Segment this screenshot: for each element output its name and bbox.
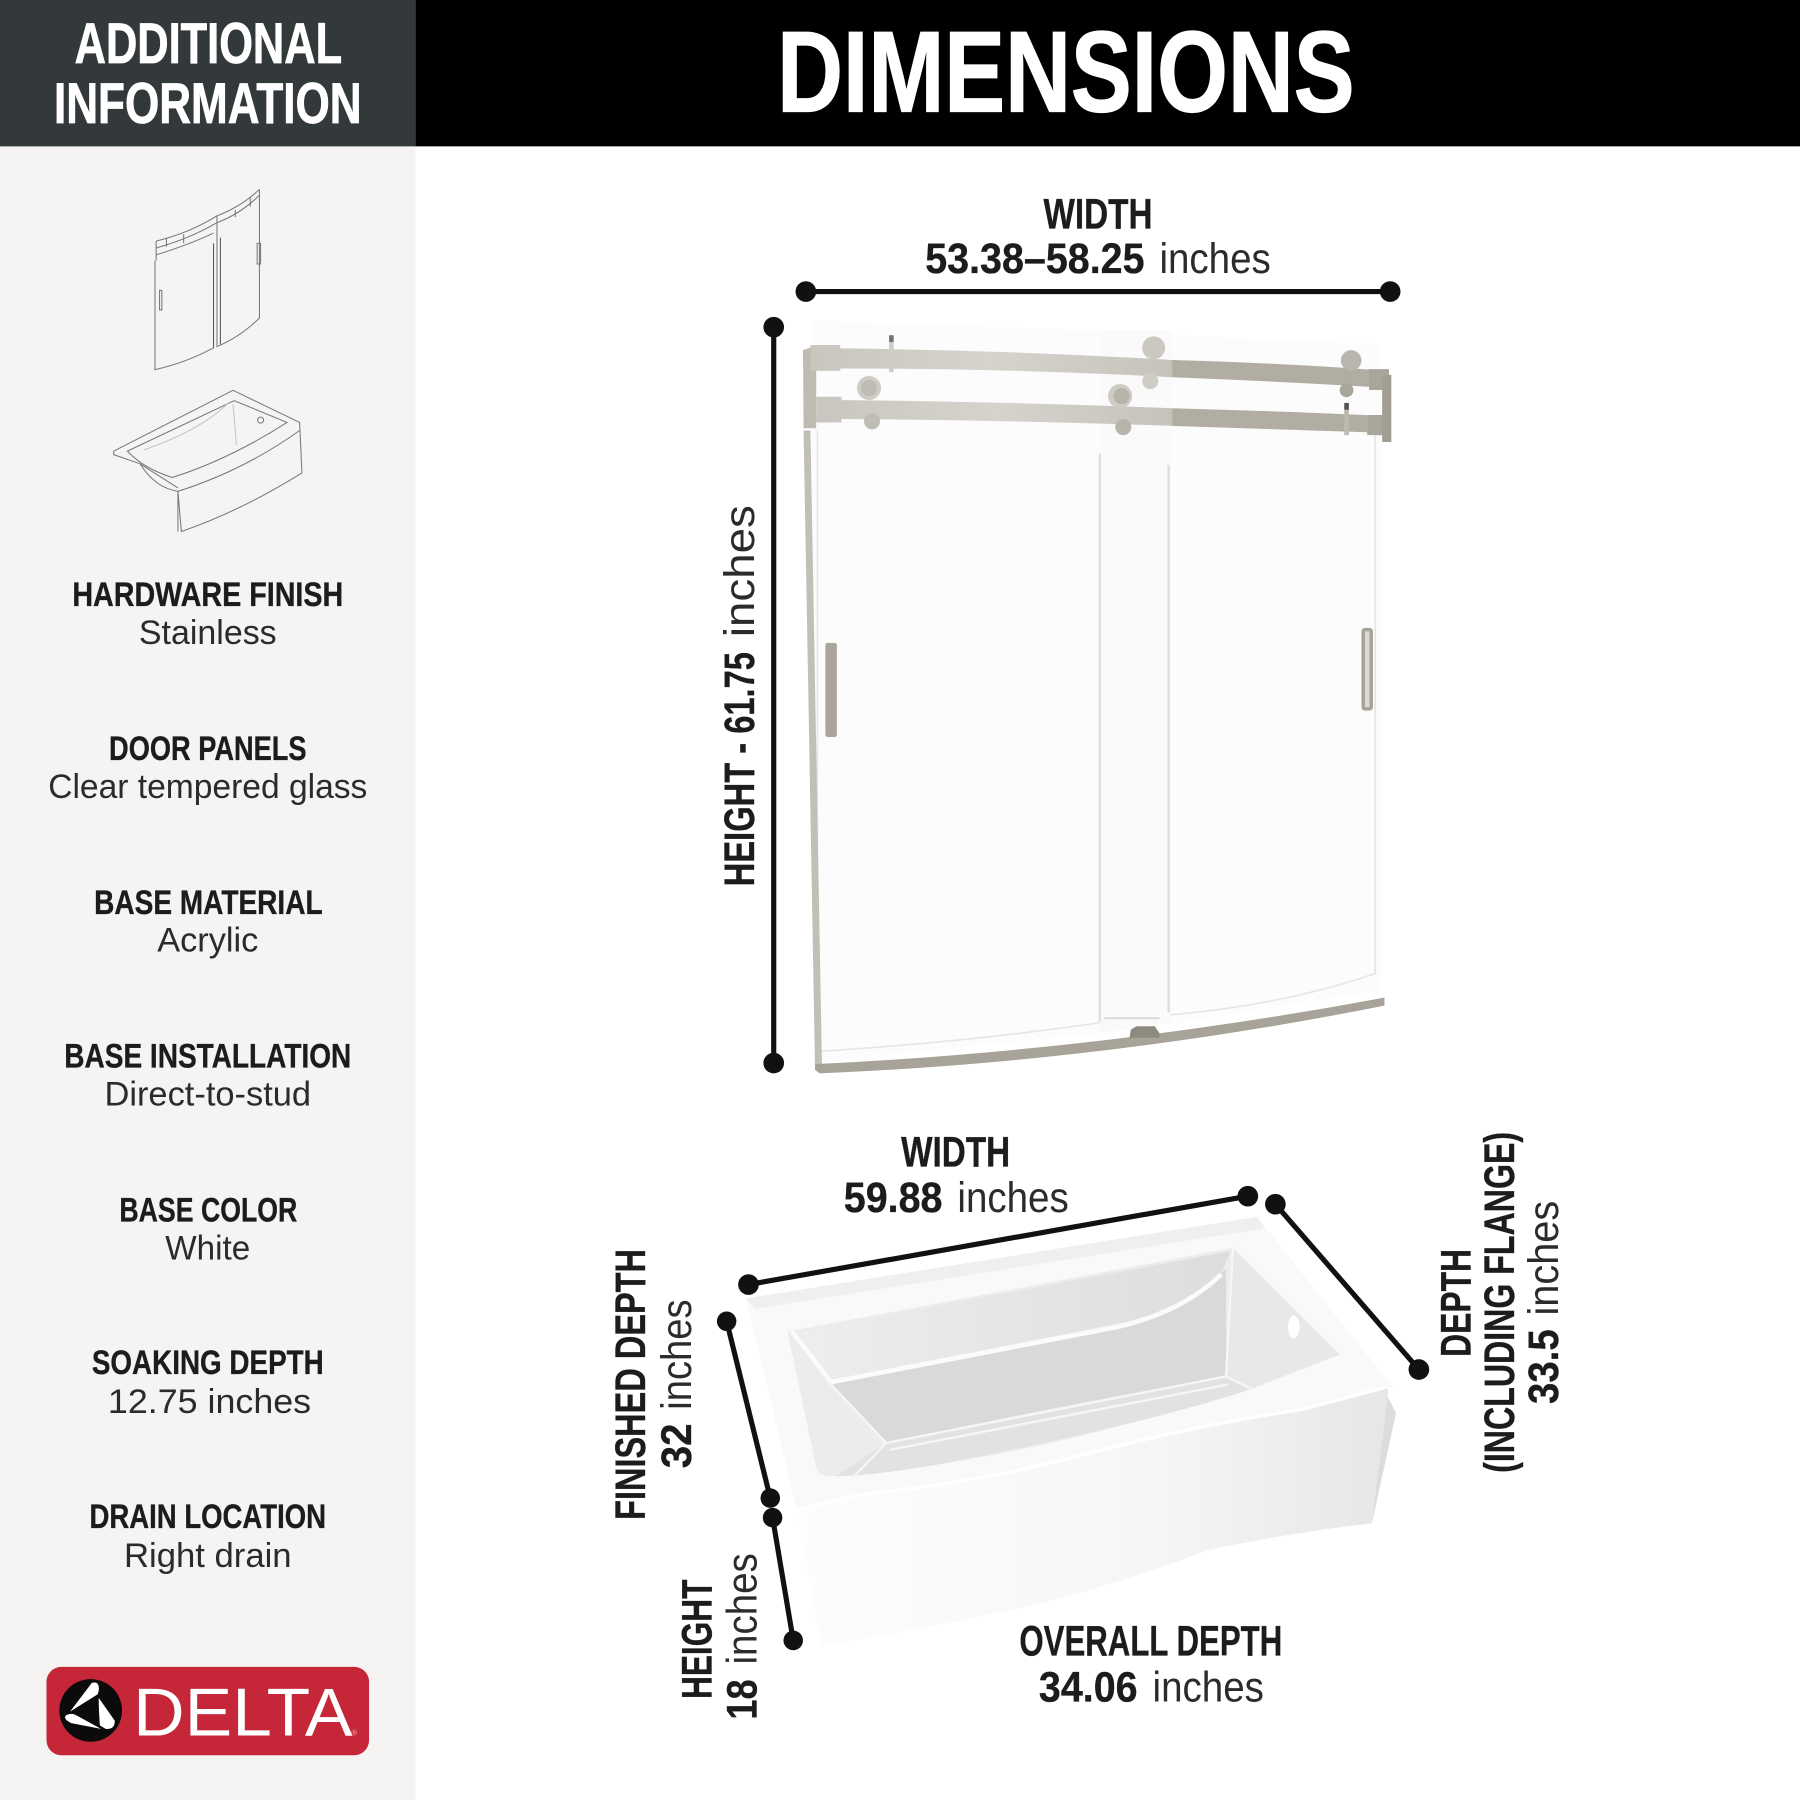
spec: soaking depth: SOAKING DEPTH bbox=[92, 1344, 324, 1382]
upper rail bbox=[810, 345, 1172, 377]
finished depth dimension: inches bbox=[653, 1299, 700, 1410]
spec: door panels: Clear tempered glass bbox=[48, 768, 367, 806]
height dimension: tub bbox=[674, 1508, 803, 1720]
depth including flange dimension: (INCLUDING FLANGE) bbox=[1476, 1132, 1523, 1473]
basin bbox=[788, 1248, 1340, 1476]
height dimension: tub: HEIGHT bbox=[674, 1580, 721, 1699]
overflow drain bbox=[1288, 1316, 1299, 1339]
spec: door panels bbox=[48, 730, 367, 806]
spec: base installation: Direct-to-stud bbox=[104, 1075, 311, 1113]
spec: base installation bbox=[64, 1038, 351, 1113]
spec: base color bbox=[119, 1191, 297, 1267]
width dimension: shower: WIDTH bbox=[1043, 190, 1153, 237]
shower door product bbox=[803, 320, 1391, 1073]
header bar: dimensions bbox=[416, 0, 1800, 146]
overall depth dimension: inches bbox=[1153, 1663, 1264, 1710]
center overlap panel bbox=[1100, 331, 1171, 1033]
icon: shower door line drawing bbox=[155, 189, 261, 370]
bottom track bbox=[815, 998, 1384, 1073]
back wall above seat bbox=[792, 1251, 1231, 1380]
tub skirt bbox=[797, 1387, 1396, 1646]
spec: base material: Acrylic bbox=[157, 922, 258, 960]
finished depth dimension: FINISHED DEPTH bbox=[607, 1249, 654, 1520]
width dimension: shower: inches bbox=[1159, 235, 1271, 282]
overall depth dimension: OVERALL DEPTH bbox=[1019, 1617, 1282, 1664]
depth including flange dimension: DEPTH bbox=[1433, 1249, 1480, 1357]
sidebar panel bbox=[0, 146, 416, 1800]
tub rim bbox=[746, 1217, 1392, 1510]
spec: drain location: Right drain bbox=[124, 1537, 292, 1575]
spec: base color: White bbox=[165, 1229, 250, 1267]
left jamb bbox=[804, 430, 822, 1070]
height dimension: shower: HEIGHT - 61.75 bbox=[716, 652, 763, 886]
icon: bathtub line drawing bbox=[114, 390, 302, 532]
left handle bbox=[825, 643, 837, 737]
spec: base material: BASE MATERIAL bbox=[94, 884, 323, 922]
left bracket bbox=[803, 346, 816, 428]
sidebar heading: INFORMATION bbox=[54, 72, 362, 136]
glass panels bbox=[810, 320, 1381, 1062]
back flange bbox=[746, 1217, 1265, 1309]
rollers bbox=[857, 335, 1361, 435]
depth including flange dimension bbox=[1265, 1132, 1567, 1473]
sidebar heading bbox=[0, 0, 416, 146]
finished depth dimension bbox=[607, 1249, 780, 1520]
spec: hardware finish: HARDWARE FINISH bbox=[72, 576, 343, 614]
spec: drain location: DRAIN LOCATION bbox=[90, 1498, 326, 1536]
front lip bbox=[797, 1387, 1388, 1510]
width dimension: tub: inches bbox=[957, 1174, 1069, 1221]
spec: soaking depth: 12.75 inches bbox=[108, 1383, 311, 1421]
width dimension: tub bbox=[738, 1128, 1258, 1295]
width dimension: tub: WIDTH bbox=[901, 1128, 1010, 1175]
sidebar heading: ADDITIONAL bbox=[75, 12, 342, 76]
right handle bbox=[1361, 628, 1373, 711]
door edges bbox=[817, 425, 1375, 1052]
width dimension: tub: 59.88 bbox=[844, 1174, 942, 1221]
spec: base color: BASE COLOR bbox=[119, 1191, 297, 1229]
bottom guide bbox=[1130, 1026, 1159, 1038]
right brackets bbox=[1367, 369, 1389, 435]
width dimension: shower bbox=[796, 190, 1401, 302]
spec: hardware finish bbox=[72, 576, 343, 652]
seat ledge bbox=[792, 1274, 1221, 1382]
spec: drain location bbox=[90, 1498, 326, 1575]
spec: base installation: BASE INSTALLATION bbox=[64, 1038, 351, 1076]
header bar: dimensions: DIMENSIONS bbox=[777, 8, 1355, 136]
height dimension: shower: inches bbox=[716, 505, 763, 637]
overall depth dimension: 34.06 bbox=[1039, 1663, 1138, 1710]
spec: hardware finish: Stainless bbox=[139, 614, 277, 652]
height dimension: tub: 18 bbox=[719, 1679, 766, 1720]
depth including flange dimension: inches bbox=[1520, 1201, 1567, 1316]
wall below seat bbox=[831, 1268, 1226, 1443]
height dimension: shower bbox=[716, 317, 784, 1073]
overall depth dimension bbox=[1019, 1617, 1282, 1710]
spec: door panels: DOOR PANELS bbox=[109, 730, 307, 768]
right flange bbox=[1372, 1397, 1396, 1523]
height dimension: tub: inches bbox=[719, 1553, 766, 1665]
logo: delta bbox=[46, 1667, 369, 1755]
basin highlights bbox=[831, 1248, 1251, 1475]
width dimension: shower: 53.38–58.25 bbox=[925, 235, 1145, 282]
spec: base material bbox=[94, 884, 323, 960]
bathtub product bbox=[746, 1217, 1396, 1646]
depth including flange dimension: 33.5 bbox=[1520, 1329, 1567, 1404]
lower rail bbox=[816, 397, 1172, 426]
right wall bbox=[1226, 1248, 1340, 1389]
basin floor bbox=[836, 1376, 1251, 1476]
logo: delta: ® bbox=[351, 1729, 357, 1738]
finished depth dimension: 32 bbox=[653, 1423, 700, 1468]
spec: soaking depth bbox=[92, 1344, 324, 1421]
logo: delta: DELTA bbox=[133, 1676, 353, 1751]
